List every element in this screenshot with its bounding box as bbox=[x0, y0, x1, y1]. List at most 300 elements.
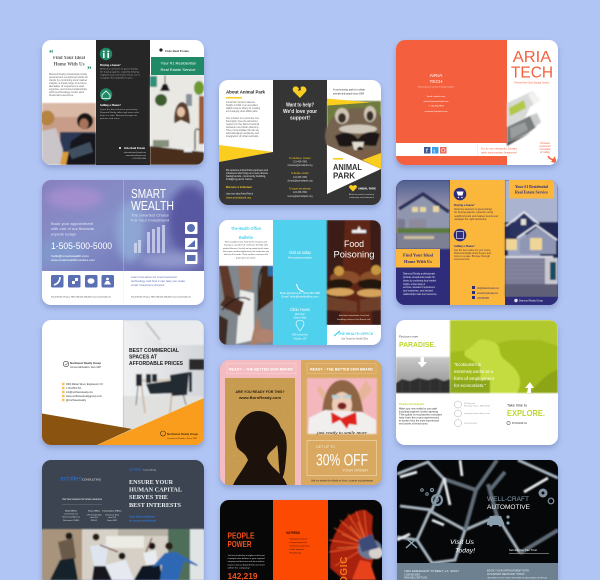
our friends list: • Public programs bbox=[289, 549, 304, 551]
text visit us today bbox=[450, 539, 475, 554]
headline find your inner paradise bbox=[399, 334, 436, 349]
center contact list: donate@animalpark.org bbox=[288, 180, 313, 182]
headline aria tech bbox=[511, 49, 553, 84]
headline want to help: support! bbox=[290, 116, 310, 122]
selling text bbox=[100, 104, 139, 120]
headline ensure your human capital: BEST INTERESTS bbox=[129, 502, 181, 509]
footer text: Smart Wealth, Finance, NH 12345 505-500-5000 www.smartwealth.com bbox=[51, 296, 111, 298]
contact text: T: 123-456-7890 bbox=[428, 106, 444, 108]
icons: gears left bbox=[421, 488, 442, 505]
phone and email: Book appointments: (123) 456-7890 bbox=[280, 292, 321, 295]
achilles logo bbox=[60, 476, 101, 480]
discount box: YOUR ORDER bbox=[342, 468, 368, 472]
appointment text and phone: 1-505-500-5000 bbox=[51, 241, 112, 251]
headline best commercial spaces: AFFORDABLE PRICES bbox=[129, 361, 183, 367]
logo: northwest realty group bbox=[63, 361, 102, 369]
contact text: customer@ariatech.com bbox=[424, 110, 448, 113]
navy panel body text: services, decades of experience bbox=[403, 286, 436, 289]
side icon squares bbox=[185, 222, 198, 264]
top right logo bbox=[129, 468, 156, 471]
headline well-craft automotive: AUTOMOTIVE bbox=[487, 505, 530, 511]
top right logo: achilles bbox=[129, 468, 142, 472]
photo: misty trees bbox=[396, 357, 450, 393]
body text: company and business and more workers bbox=[228, 560, 265, 563]
photo: two women meeting bbox=[40, 103, 96, 165]
center contact list: volunteer@animalpark.org bbox=[288, 164, 313, 167]
right dark footer wedge bbox=[327, 169, 381, 205]
center dark panel bbox=[273, 80, 327, 205]
white footer body bbox=[399, 402, 443, 426]
center cyan panel bbox=[273, 220, 327, 345]
headline food poisoning: Food bbox=[344, 239, 364, 249]
appointment text and phone: Book your appointment bbox=[51, 221, 94, 226]
headline find your inner paradise: Find your inner bbox=[399, 334, 419, 338]
middle contact icons and text: sample@paradise.com bbox=[464, 413, 490, 415]
back panel logo: ARIA bbox=[430, 73, 443, 79]
brochure: people power, black and orange bbox=[220, 500, 383, 580]
blue call to action: Your hire solutions bbox=[129, 514, 155, 518]
blue call to action: for success and beyond bbox=[129, 518, 156, 522]
footer logo bbox=[160, 431, 199, 440]
quote on green: extremely useful as a bbox=[454, 369, 493, 375]
contact text: Email: ariatech.com bbox=[427, 95, 445, 98]
top right label: Your #1 Residential bbox=[515, 185, 548, 189]
our friends list: • Community partners bbox=[289, 541, 307, 544]
right yellow triangle bbox=[362, 153, 381, 169]
our friends list: • Diversity in leadership bbox=[289, 544, 310, 548]
discount box bbox=[307, 440, 376, 476]
photo: raccoon bbox=[325, 101, 391, 170]
left panel heading: Find Your Ideal bbox=[53, 56, 86, 61]
headline best commercial spaces: SPACES AT bbox=[129, 354, 158, 360]
selling text: process and more. bbox=[454, 258, 470, 261]
left panel body text: clients by combining local market bbox=[49, 79, 87, 82]
icon: house in green circle bbox=[100, 88, 112, 101]
headline ensure your human capital: ENSURE YOUR bbox=[129, 479, 173, 486]
selling text: Selling a Home? bbox=[100, 103, 121, 107]
social icons: t bbox=[434, 148, 436, 154]
contact text: website@ariatechinfo.com bbox=[424, 100, 449, 103]
left header bbox=[227, 364, 296, 374]
footer text: Smart Wealth, Finance, NH 12345 505-500-5000 www.smartwealth.com bbox=[131, 296, 191, 298]
green banner bbox=[151, 57, 204, 75]
bottom note: Visit our website for details on hours, coupons and giveaways bbox=[311, 478, 373, 482]
left panel body text: with technology tools and bbox=[49, 91, 85, 94]
discount box: 30% OFF bbox=[316, 450, 368, 470]
left panel heading: Home With Us bbox=[54, 62, 85, 68]
headline ensure your human capital: SERVES THE bbox=[129, 494, 168, 501]
label find your ideal home: Find Your Ideal bbox=[403, 254, 433, 258]
footer booking text: BOOK YOUR APPOINTMENT WITH bbox=[487, 570, 529, 572]
brochure: food poisoning, cyan health bbox=[219, 220, 388, 348]
brochure: smart wealth, purple finance bbox=[38, 180, 212, 308]
about body text: Animal Park, founded in Lakeview bbox=[226, 101, 255, 104]
selling text: Diamond Realty show buyers and bbox=[454, 252, 492, 255]
right top text bbox=[333, 88, 365, 96]
buying text: for buying agents, expertly helping bbox=[100, 70, 140, 74]
footer logo bbox=[505, 297, 558, 305]
center contact list: To report lost animals: bbox=[289, 188, 311, 190]
center contact list: 123-456-7890 bbox=[293, 192, 308, 194]
left panel body text: expertise, and trusted relationships bbox=[49, 88, 88, 91]
take time to explore bbox=[507, 404, 545, 425]
three office address columns: Greenwood Avenue bbox=[62, 516, 80, 518]
quote on green: for economists." bbox=[454, 383, 486, 389]
green banner: Your #1 Residential bbox=[160, 62, 196, 66]
headline smart wealth: The Smartest Choice bbox=[131, 212, 170, 218]
white footer body: to tourism from the most experienced bbox=[399, 420, 440, 422]
middle contact icons and text: Manage Parks, MA 12345 bbox=[464, 404, 491, 408]
appointment text and phone bbox=[51, 221, 112, 262]
headline food poisoning: Poisoning bbox=[334, 250, 374, 260]
left panel body text: insights, a broad range of services, bbox=[49, 82, 87, 85]
selling text: from in a sale. Browse through our bbox=[100, 114, 137, 117]
center contact list: rescue@animalpark.org bbox=[288, 195, 313, 198]
selling text: Selling a Home? bbox=[454, 244, 475, 248]
our friends list: • Fundraising bbox=[289, 552, 301, 554]
left dark panel text: volunteers who bring us to more diverse bbox=[226, 172, 269, 175]
clinic hours: Clinic Hours bbox=[290, 307, 311, 312]
footer text: smart investment choices. bbox=[131, 283, 165, 287]
headline people power: PEOPLE bbox=[228, 532, 255, 540]
appointment text and phone: experts today! bbox=[51, 232, 76, 236]
icon: car and gears bbox=[487, 515, 510, 527]
arrow down bbox=[418, 357, 427, 368]
buying text: neighborhoods and market trends and bbox=[454, 215, 499, 218]
footer logo and text bbox=[349, 185, 376, 199]
contact list with yellow icons: @northwestrealty bbox=[66, 399, 87, 402]
service tagline bbox=[509, 548, 549, 554]
contact list with yellow icons bbox=[62, 383, 103, 402]
back panel logo: Small scale yet a universe of storage solutions bbox=[418, 86, 454, 88]
left panel heading bbox=[49, 50, 92, 70]
selling text bbox=[454, 244, 492, 261]
three office address columns: Innovation Office bbox=[102, 510, 122, 512]
three office address columns: 1765 Sample Way bbox=[86, 514, 102, 516]
headline well-craft automotive bbox=[487, 497, 530, 511]
label find your ideal home: Home With Us bbox=[404, 260, 433, 264]
left header: READY – THE BETTER SKIN BRAND bbox=[229, 368, 293, 372]
right white wedge bbox=[327, 145, 381, 194]
body text: within the company." bbox=[228, 566, 251, 570]
contact list with yellow icons: 1801 Market Street, Englewood, CO bbox=[66, 383, 103, 386]
photo: blood pressure check bbox=[219, 266, 275, 345]
footer logo: Diamond Realty Group bbox=[519, 300, 544, 302]
newsletter text: Go to our newsprint Library bbox=[481, 146, 518, 150]
photo: woman with red bow on pink bbox=[307, 378, 377, 434]
abstract finance background bbox=[38, 186, 212, 268]
photo caption: Avoid food contamination. Fresh food bbox=[339, 314, 369, 317]
label find your ideal home bbox=[396, 249, 440, 268]
three office address columns: Level 5 Suite One bbox=[64, 512, 78, 516]
script caption: just ready to smile more bbox=[316, 430, 367, 435]
phone and email bbox=[280, 292, 321, 298]
title animal park: PARK bbox=[333, 172, 355, 180]
our friends list: • Inspiring advocacy for all bbox=[289, 538, 307, 540]
footer logo: Northwest Realty Group bbox=[167, 433, 199, 436]
appointment text and phone: with one of our financial bbox=[51, 226, 94, 231]
bulletin body text: We're available to help. Food that the emergency and bbox=[225, 240, 268, 244]
headline well-craft automotive: WELL-CRAFT bbox=[487, 497, 529, 503]
center panel logo and contact: Oslo Real Estate bbox=[124, 146, 146, 150]
about body text: Our mission is to promote zoo bbox=[226, 117, 260, 120]
side callout and arrow bbox=[540, 142, 556, 163]
buying text: Welcome answers to great listings bbox=[100, 68, 138, 70]
three office address columns: Unit 201 bbox=[90, 516, 98, 519]
navy panel body text: relationships tools and resources. bbox=[403, 293, 437, 296]
photo: woman in kitchen bbox=[150, 75, 204, 165]
left yellow wedge bbox=[219, 145, 273, 162]
left dark panel text: www.animalpark.org bbox=[226, 196, 252, 200]
orange wedge bbox=[97, 398, 204, 445]
contact list with yellow icons: info@northwestrealty.com bbox=[66, 391, 93, 394]
top right label: Real Estate Service bbox=[515, 190, 548, 194]
footer logo and text: All of our work is made by bbox=[349, 193, 374, 196]
navy panel body text: clients by combining local market bbox=[403, 280, 436, 282]
contact list with icons: 1-800-555-5555 bbox=[477, 298, 490, 300]
footer logo and text: ANIMAL PARK bbox=[358, 186, 376, 190]
social icons bbox=[424, 147, 446, 154]
headline best commercial spaces: BEST COMMERCIAL bbox=[129, 348, 180, 354]
headline find your inner paradise: PARADISE. bbox=[399, 340, 436, 349]
center yellow panel bbox=[450, 180, 505, 305]
about body text bbox=[226, 101, 261, 138]
white footer body: Make your new reality by your path bbox=[399, 408, 438, 410]
left dark panel text bbox=[226, 169, 269, 200]
headline ensure your human capital bbox=[129, 480, 182, 507]
about body text: integration of urban animals. bbox=[226, 135, 259, 138]
back panel logo bbox=[418, 73, 454, 88]
top right logo: Consulting bbox=[143, 468, 156, 472]
heading the health office bulletin: The Health Office bbox=[231, 226, 262, 231]
text visit us today: Visit Us bbox=[450, 539, 475, 546]
text visit us today: Today! bbox=[455, 548, 475, 554]
navy panel body text: provide exceptional results for bbox=[403, 276, 435, 279]
left dark wedge bbox=[219, 152, 273, 205]
headline people power: POWER bbox=[228, 540, 252, 549]
newsletter text: with innovative features! bbox=[481, 150, 517, 154]
footer logo: Commercial Realtors, Since 1987 bbox=[167, 437, 198, 440]
center contact list bbox=[288, 157, 313, 198]
three office address columns: Head Office bbox=[65, 510, 77, 512]
about body text: thoroughly, hone the animal tiny bbox=[226, 120, 259, 123]
selling text: Learn the best value for your home. bbox=[100, 108, 138, 111]
right panel logo bbox=[159, 48, 189, 52]
logo the health office: Your Trusted by Health Office bbox=[341, 338, 369, 340]
footer address bbox=[404, 570, 460, 580]
headline aria tech: ARIA bbox=[513, 49, 552, 66]
brochure: achilles consulting, dark slate bbox=[42, 460, 204, 580]
photo caption: handling reduces the illness risk. bbox=[337, 318, 372, 321]
green banner: Real Estate Service bbox=[160, 68, 196, 72]
brochure: real estate, green and dark bbox=[40, 40, 204, 168]
arrow up bbox=[525, 382, 534, 393]
clinic hours: 8:00am-8:00pm bbox=[294, 316, 306, 320]
top right label bbox=[509, 180, 554, 198]
quote on green: "Ecotourism is bbox=[454, 362, 482, 368]
logo the health office: THE HEALTH OFFICE bbox=[338, 331, 373, 336]
about body text: behaviour and urban planning. bbox=[226, 126, 259, 129]
side callout and arrow: promotions bbox=[540, 148, 551, 151]
photo: house at dusk right bbox=[505, 180, 558, 297]
logo the health office bbox=[327, 325, 381, 345]
navy panel body text: Diamond Realty professionals bbox=[403, 272, 436, 276]
about heading bbox=[226, 90, 265, 98]
left dark panel text: bridging and more. bbox=[226, 178, 253, 181]
photo: green aerial river bbox=[450, 320, 558, 393]
gray footer strip bbox=[397, 563, 558, 580]
appointment text and phone: hello@smartwealth.com bbox=[51, 254, 89, 258]
left panel body text: Diamond Realty professionals provide bbox=[49, 73, 88, 76]
left dark panel text: backgrounds, community building, bbox=[226, 175, 266, 178]
social icons: f bbox=[426, 148, 428, 154]
white footer body: This guide to ecotourism includes bbox=[399, 414, 443, 416]
bulletin body text: protections for home. bbox=[236, 256, 256, 260]
brochure: paradise explore, lime green bbox=[396, 320, 558, 448]
selling text: Diamond Realty sellers get more value bbox=[100, 111, 140, 114]
about body text: digital resource library for creating bbox=[226, 107, 261, 110]
phone and email: Email: hello@healthoffice.com bbox=[282, 296, 318, 298]
logo: northwest realty group: Northwest Realty Group bbox=[70, 361, 101, 365]
address: 4500 Avenue Drive bbox=[292, 334, 308, 336]
headline want to help bbox=[283, 102, 317, 122]
about body text: They contemplate the life we bbox=[226, 129, 260, 132]
service tagline: Service You Can Trust bbox=[509, 548, 537, 552]
side callout and arrow: Choose bbox=[540, 142, 551, 145]
selling text: more in a sale. Browse through bbox=[454, 255, 491, 258]
left panel body text bbox=[49, 73, 88, 97]
icon: location pin bbox=[296, 320, 304, 331]
selling text: Get the best value for your home. bbox=[454, 249, 491, 252]
tagline are you ready: ARE YOU READY FOR THIS? bbox=[236, 389, 285, 394]
headline best commercial spaces bbox=[129, 348, 183, 365]
photo: steel hexagon structure bbox=[397, 460, 558, 563]
about body text: respect to the field of animal bbox=[226, 123, 260, 126]
quote on green: form of employment bbox=[454, 376, 495, 382]
icon: yellow heart bbox=[293, 86, 306, 98]
navy panel body text: insights, a broad range of bbox=[403, 283, 425, 286]
center panel logo and contact bbox=[119, 147, 146, 159]
three office address columns: Rochester 78484 bbox=[63, 519, 79, 522]
middle contact icons and text: 3000 Sigma Road bbox=[464, 403, 475, 405]
contact list with icons bbox=[472, 286, 499, 300]
icon: shopping cart circle bbox=[454, 188, 466, 200]
middle contact icons and text: 555-555-5555 bbox=[464, 423, 478, 425]
buying text bbox=[100, 63, 140, 80]
address bbox=[292, 334, 308, 340]
footer logo and text: community and volunteers bbox=[349, 196, 374, 199]
center contact list: To donate, contact: bbox=[291, 172, 309, 175]
footer booking text bbox=[487, 570, 548, 580]
white footer body: including beginner tourism growing bbox=[399, 410, 439, 414]
icon: crossed tools bbox=[406, 538, 417, 548]
buying text: navigate the right decisions. bbox=[454, 218, 487, 221]
left panel heading: “ bbox=[49, 48, 54, 58]
left dark panel text: Learn more about Animal Park at bbox=[226, 192, 253, 196]
center dark panel bbox=[96, 40, 150, 165]
footer text: technology and how it can help you make bbox=[131, 279, 186, 283]
white footer body: new contents of the last survey. bbox=[399, 422, 428, 426]
newsletter text bbox=[477, 143, 518, 156]
bulletin body text: having or accident of someone healthy with bbox=[224, 244, 269, 246]
clinic hours: Mon-Sun bbox=[295, 313, 306, 316]
right panel logo: Oslo Real Estate bbox=[165, 49, 189, 53]
clinic hours bbox=[290, 307, 311, 320]
three office address columns: 5120 Sector Road bbox=[105, 514, 119, 516]
center contact list: 123-456-7890 bbox=[293, 162, 308, 164]
address: Anytown, ZIP bbox=[294, 338, 307, 340]
take time to explore: EXPLORE. bbox=[507, 408, 545, 418]
about body text: and managing urban wildlife parks. bbox=[226, 110, 258, 113]
brochure: ready skin brand, pink and tan bbox=[220, 360, 382, 488]
heading the health office bulletin bbox=[231, 226, 262, 240]
tagline: Your best resource for human resources bbox=[62, 498, 103, 501]
visit us today: Visit us today bbox=[289, 250, 312, 255]
three office address columns: Suite 4432 bbox=[107, 519, 117, 522]
headline food poisoning bbox=[334, 239, 374, 260]
buying text: Welcome answers to great listings bbox=[454, 208, 493, 211]
center panel logo and contact: +1 222-333-4444 bbox=[132, 158, 146, 160]
left tan panel bbox=[225, 378, 295, 488]
bulletin body text: We're open and thoroughly wash your hands after you bbox=[223, 250, 270, 253]
coral panel bbox=[396, 40, 507, 165]
footer address: WWW.WELLCRAFT.COM bbox=[404, 576, 427, 580]
take time to explore: Take time to bbox=[507, 404, 527, 408]
headline smart wealth: SMART bbox=[131, 186, 166, 201]
left dark panel text: Become a Volunteer bbox=[226, 186, 252, 189]
footer address: 1-508-550-5500 bbox=[404, 574, 421, 576]
center contact list: 123-456-7890 bbox=[293, 177, 308, 179]
headline smart wealth bbox=[131, 189, 174, 222]
contact text bbox=[424, 95, 449, 113]
photo: jumping team bbox=[42, 529, 204, 580]
dotted decoration bbox=[228, 382, 290, 462]
left panel body text: personal and exceptional results for bbox=[49, 76, 88, 79]
icon: sale sign circle bbox=[454, 229, 466, 241]
right top text: A community park for urban bbox=[333, 88, 365, 92]
right header: READY – THE BETTER SKIN BRAND bbox=[310, 368, 373, 372]
brown wedge bbox=[42, 414, 132, 445]
icon: people in green circle bbox=[100, 48, 112, 60]
white footer strip bbox=[42, 271, 204, 305]
center orange panel bbox=[273, 500, 328, 580]
photo: office meeting room bbox=[123, 320, 204, 445]
selling text: process and more. bbox=[100, 117, 120, 120]
left dark panel text: We welcome Animal Park employees and bbox=[226, 169, 269, 172]
three office address columns bbox=[62, 510, 122, 521]
tagline are you ready: www.BornReady.com bbox=[238, 395, 281, 400]
footer text bbox=[51, 275, 191, 298]
heading the health office bulletin: Bulletin bbox=[239, 235, 253, 240]
buying text: Buying a home? bbox=[100, 63, 121, 67]
footer address: 1900 EMERGENT STREET, LA. 90017 bbox=[404, 570, 460, 573]
body text: respect and act beyond their own level bbox=[228, 564, 265, 566]
discount box: GET UP TO bbox=[316, 444, 335, 449]
headline ensure your human capital: HUMAN CAPITAL bbox=[129, 486, 183, 494]
three office address columns: Team Office bbox=[88, 510, 100, 512]
contact list with icons: info@diamondrealty.com bbox=[477, 287, 499, 290]
blue contact icons bbox=[51, 275, 114, 288]
buying text bbox=[454, 203, 499, 221]
body text: "Inclusive leadership strengthens the brand bbox=[228, 554, 265, 557]
about body text: acknowledging complexity, and bbox=[226, 132, 260, 135]
buying text: navigate the tradeoffs for you. bbox=[100, 76, 133, 80]
buying text: Buying a home? bbox=[454, 203, 475, 207]
footer text: Learn more about our smart investment bbox=[131, 275, 177, 279]
appointment text and phone: www.smartwealthinvestors.com bbox=[51, 258, 95, 262]
about body text: Heights in 1994, is an accredited, bbox=[226, 104, 258, 107]
bulletin body text: medical illnesses. Get info on top priority health items. bbox=[223, 247, 269, 250]
